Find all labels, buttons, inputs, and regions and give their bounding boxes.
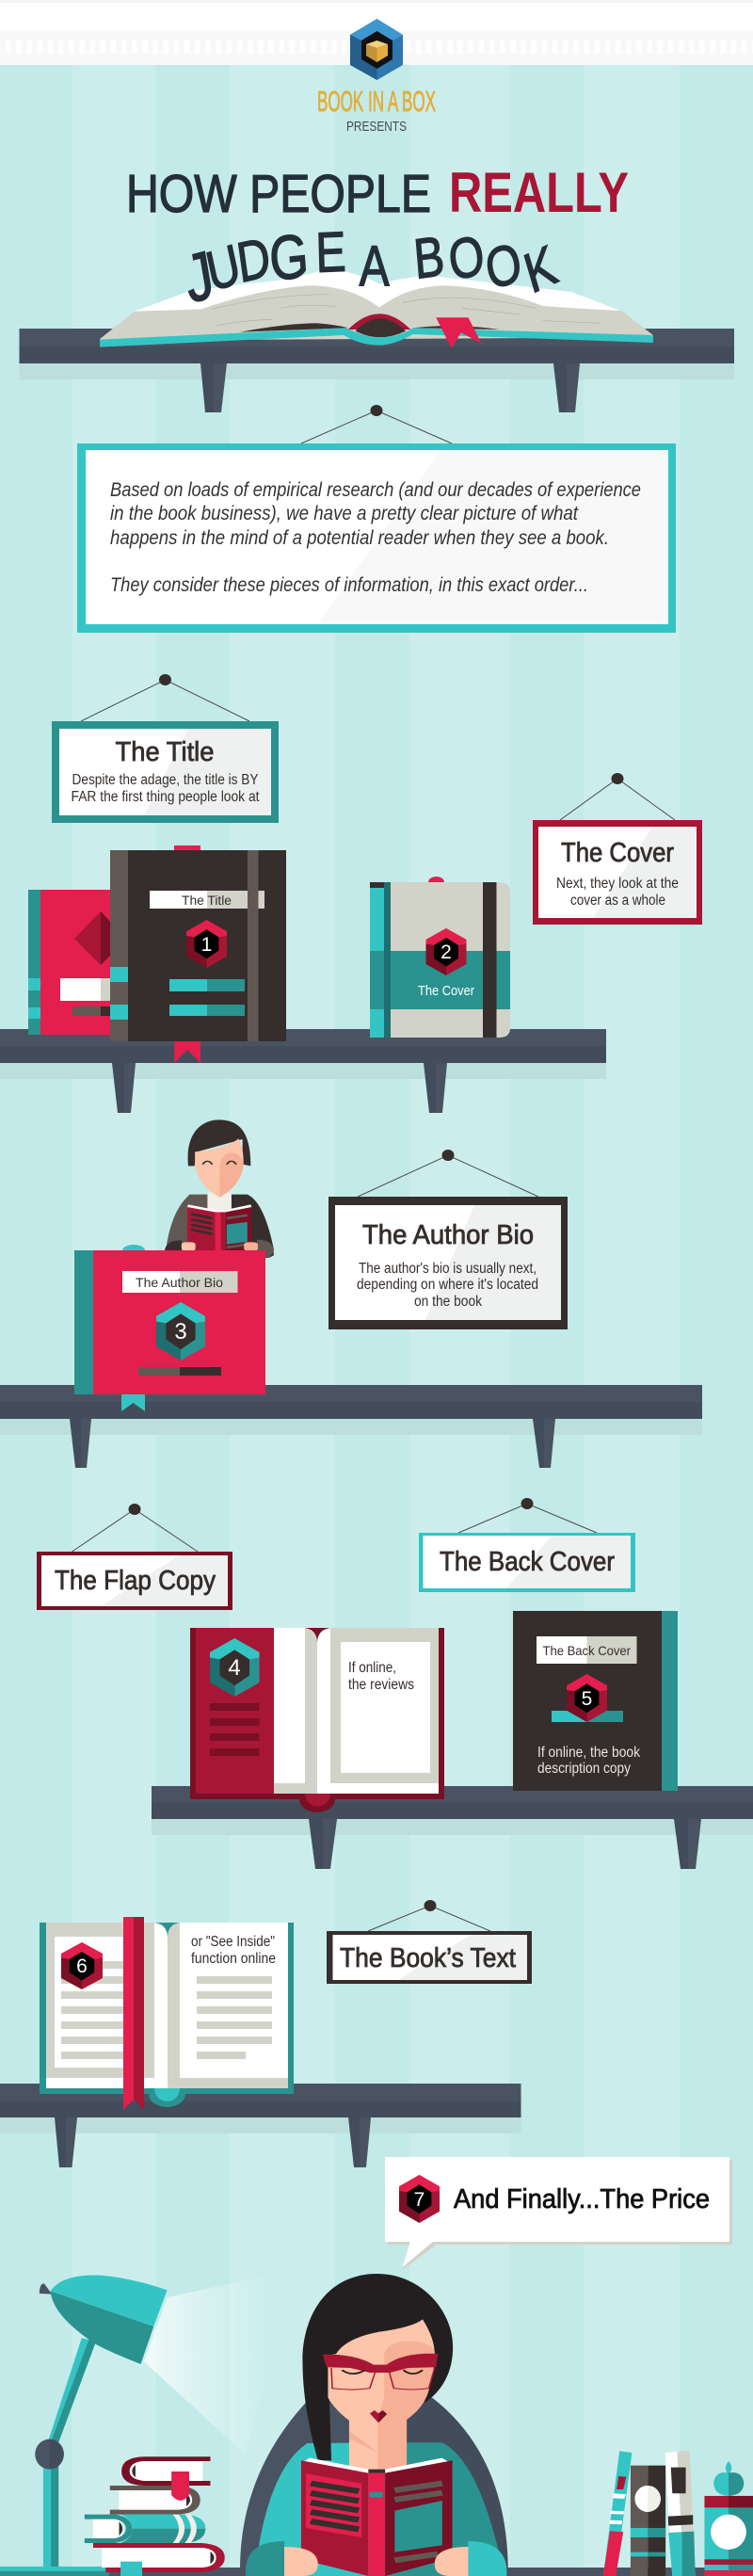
book 4: The Flap Copy: If online, <box>348 1660 396 1676</box>
panel: intro sign <box>77 405 676 633</box>
sign: The Cover <box>533 773 702 925</box>
panel: intro sign: in the book business), we have a pretty clear picture of what <box>110 503 579 524</box>
bottom scene: desk <box>0 2568 753 2576</box>
title: J <box>180 236 218 317</box>
book 6: The Book's Text: function online <box>191 1951 276 1967</box>
sign: The Title: The Title <box>115 737 215 767</box>
book 4: The Flap Copy: 4 <box>228 1655 241 1681</box>
panel: intro sign: They consider these pieces of information, in this exact order... <box>110 574 588 596</box>
book 5: The Back Cover: The Back Cover <box>542 1643 631 1658</box>
sign: The Title <box>52 674 279 823</box>
desk lamp <box>0 2269 297 2576</box>
shelf 5 <box>0 2084 521 2167</box>
title: REALLY <box>449 161 629 224</box>
book 1: The Title: The Title <box>182 893 232 908</box>
sign: The Author Bio <box>328 1150 568 1329</box>
sign: The Book's Text: The Book’s Text <box>340 1943 516 1973</box>
title: O <box>444 223 489 293</box>
stack of books <box>85 2456 225 2576</box>
book 2: The Cover <box>370 877 510 1038</box>
title: O <box>480 230 527 302</box>
title: U <box>201 233 246 304</box>
book 6: The Book's Text: or "See Inside" <box>191 1934 275 1950</box>
logo: Book in a Box <box>317 19 436 135</box>
sign: The Author Bio: on the book <box>414 1294 482 1310</box>
book 2: The Cover: The Cover <box>418 983 474 999</box>
title: D <box>233 225 274 295</box>
shelf 3 <box>0 1385 702 1468</box>
title: E <box>314 220 360 284</box>
sign: The Author Bio: The Author Bio <box>362 1220 534 1250</box>
sign: The Back Cover: The Back Cover <box>440 1547 615 1577</box>
books on right of desk <box>603 2451 753 2576</box>
title: HOW PEOPLE <box>126 164 431 224</box>
speech bubble: And Finally...The Price: And Finally...The Price <box>454 2184 710 2214</box>
sign: The Title: Despite the adage, the title is BY <box>72 772 258 788</box>
sign: The Cover: The Cover <box>561 838 674 868</box>
sign: The Flap Copy <box>37 1504 232 1610</box>
sign: The Cover: cover as a whole <box>570 893 665 909</box>
book 3: The Author Bio <box>74 1245 265 1411</box>
logo: Book in a Box: PRESENTS <box>346 120 407 135</box>
sign: The Book's Text <box>327 1900 532 1984</box>
title: G <box>267 220 311 294</box>
speech bubble: And Finally...The Price: 7 <box>414 2189 425 2211</box>
book 2: The Cover: 2 <box>441 942 452 963</box>
shelf 1 <box>19 329 734 412</box>
panel: intro sign: Based on loads of empirical research (and our decades of experience <box>110 479 641 501</box>
book 1: The Title <box>110 845 286 1063</box>
sign: The Title: FAR the first thing people look at <box>72 789 260 805</box>
sign: The Cover: Next, they look at the <box>556 876 679 892</box>
book 6: The Book's Text <box>40 1917 294 2110</box>
woman reading <box>240 2274 508 2576</box>
title <box>126 161 629 317</box>
sign: The Back Cover <box>419 1498 635 1592</box>
book 3: The Author Bio: 3 <box>174 1319 187 1344</box>
person reading <box>165 1119 274 1258</box>
shelf 4 <box>152 1786 753 1869</box>
book 3: The Author Bio: The Author Bio <box>136 1275 223 1290</box>
open book on top shelf <box>100 268 653 348</box>
panel: intro sign: happens in the mind of a potential reader when they see a book. <box>110 527 609 549</box>
shelf 2 <box>0 1029 606 1113</box>
title: A <box>360 234 399 298</box>
book 4: The Flap Copy: the reviews <box>348 1677 414 1693</box>
sign: The Author Bio: The author's bio is usually next, <box>359 1261 537 1277</box>
book 5: The Back Cover: 5 <box>582 1688 592 1710</box>
book 6: The Book's Text: 6 <box>76 1956 88 1977</box>
logo: Book in a Box: BOOK IN A BOX <box>317 85 436 118</box>
speech bubble: And Finally...The Price <box>385 2157 732 2270</box>
book 5: The Back Cover: If online, the book <box>537 1745 640 1761</box>
sign: The Author Bio: depending on where it's located <box>357 1277 538 1293</box>
title: K <box>518 233 564 305</box>
book 5: The Back Cover <box>513 1611 678 1791</box>
sign: The Flap Copy: The Flap Copy <box>55 1566 216 1596</box>
book: red book behind <box>28 890 111 1035</box>
book 4: The Flap Copy <box>190 1628 444 1812</box>
book 1: The Title: 1 <box>201 934 212 956</box>
title: B <box>411 224 447 291</box>
book 5: The Back Cover: description copy <box>537 1761 631 1777</box>
